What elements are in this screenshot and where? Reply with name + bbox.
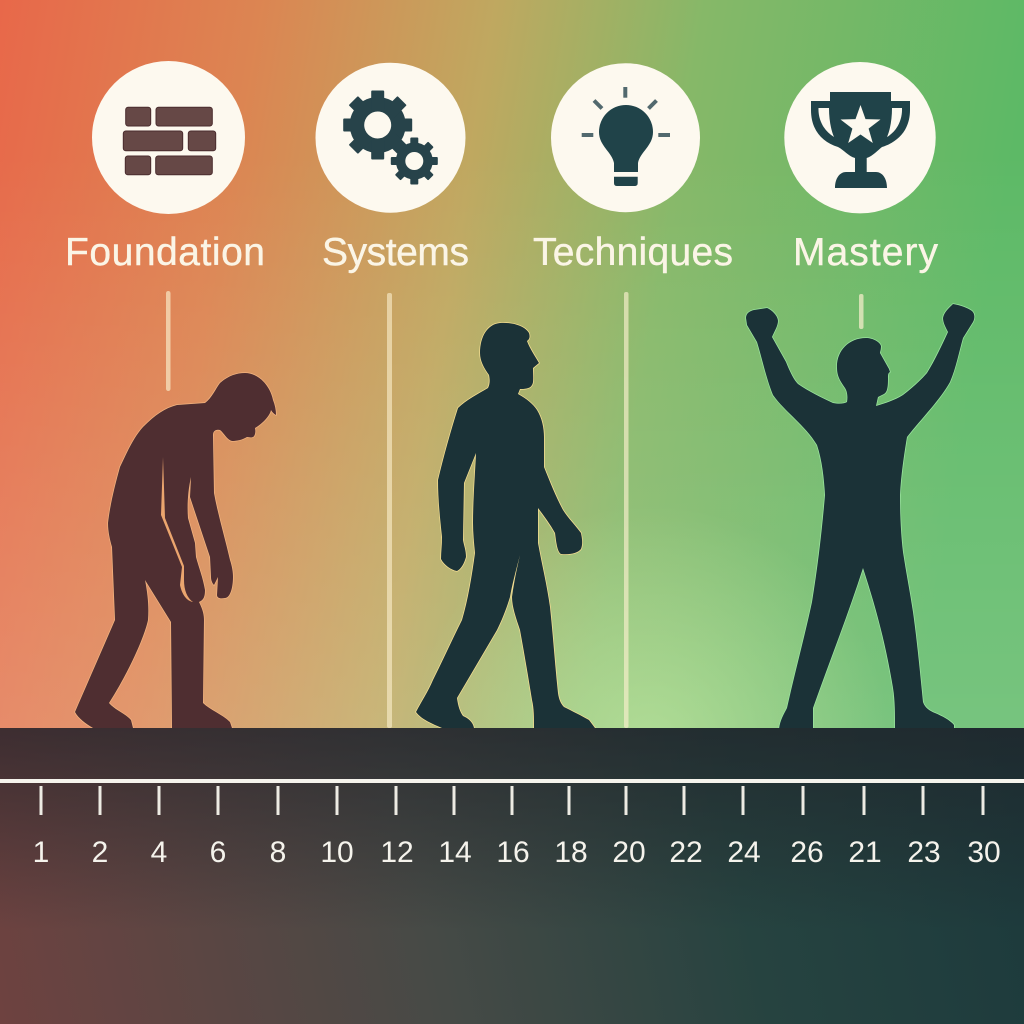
heading: Techniques: Techniques (533, 231, 733, 274)
day numbers: 2 (92, 836, 108, 869)
day numbers: 6 (210, 836, 226, 869)
day numbers: 23 (907, 836, 941, 869)
day numbers: 12 (380, 836, 414, 869)
day numbers: 22 (669, 836, 703, 869)
icon: light bulb (551, 63, 700, 212)
day numbers: 26 (790, 836, 824, 869)
day numbers (33, 836, 1001, 869)
day numbers: 20 (612, 836, 646, 869)
day numbers: 18 (554, 836, 588, 869)
figure: slumped person (75, 373, 276, 728)
day numbers: 30 (967, 836, 1001, 869)
column: mastery (784, 62, 938, 274)
day numbers: 14 (438, 836, 472, 869)
day numbers: 8 (270, 836, 286, 869)
column: foundation (65, 61, 265, 274)
day numbers: 21 (848, 836, 882, 869)
icon: brick wall (92, 61, 245, 214)
day numbers: 4 (151, 836, 167, 869)
background gradient (0, 0, 1024, 730)
day numbers: 10 (320, 836, 354, 869)
vertical stage dividers (166, 291, 864, 728)
day numbers: 16 (496, 836, 530, 869)
icon: trophy (784, 62, 936, 213)
heading: Foundation: Foundation (65, 231, 265, 274)
timeline scale (0, 779, 1024, 869)
day numbers: 24 (727, 836, 761, 869)
day numbers: 1 (33, 836, 49, 869)
tick marks (40, 786, 984, 815)
column: systems (316, 63, 469, 274)
icon: gears (316, 63, 466, 213)
figure: celebrating person (746, 304, 974, 729)
figure: walking person (416, 323, 595, 728)
heading: Systems: Systems (322, 231, 469, 274)
heading: Mastery: Mastery (793, 231, 938, 274)
ground band (0, 728, 1024, 1024)
column: techniques (533, 63, 733, 274)
arm gap highlight (161, 457, 193, 602)
